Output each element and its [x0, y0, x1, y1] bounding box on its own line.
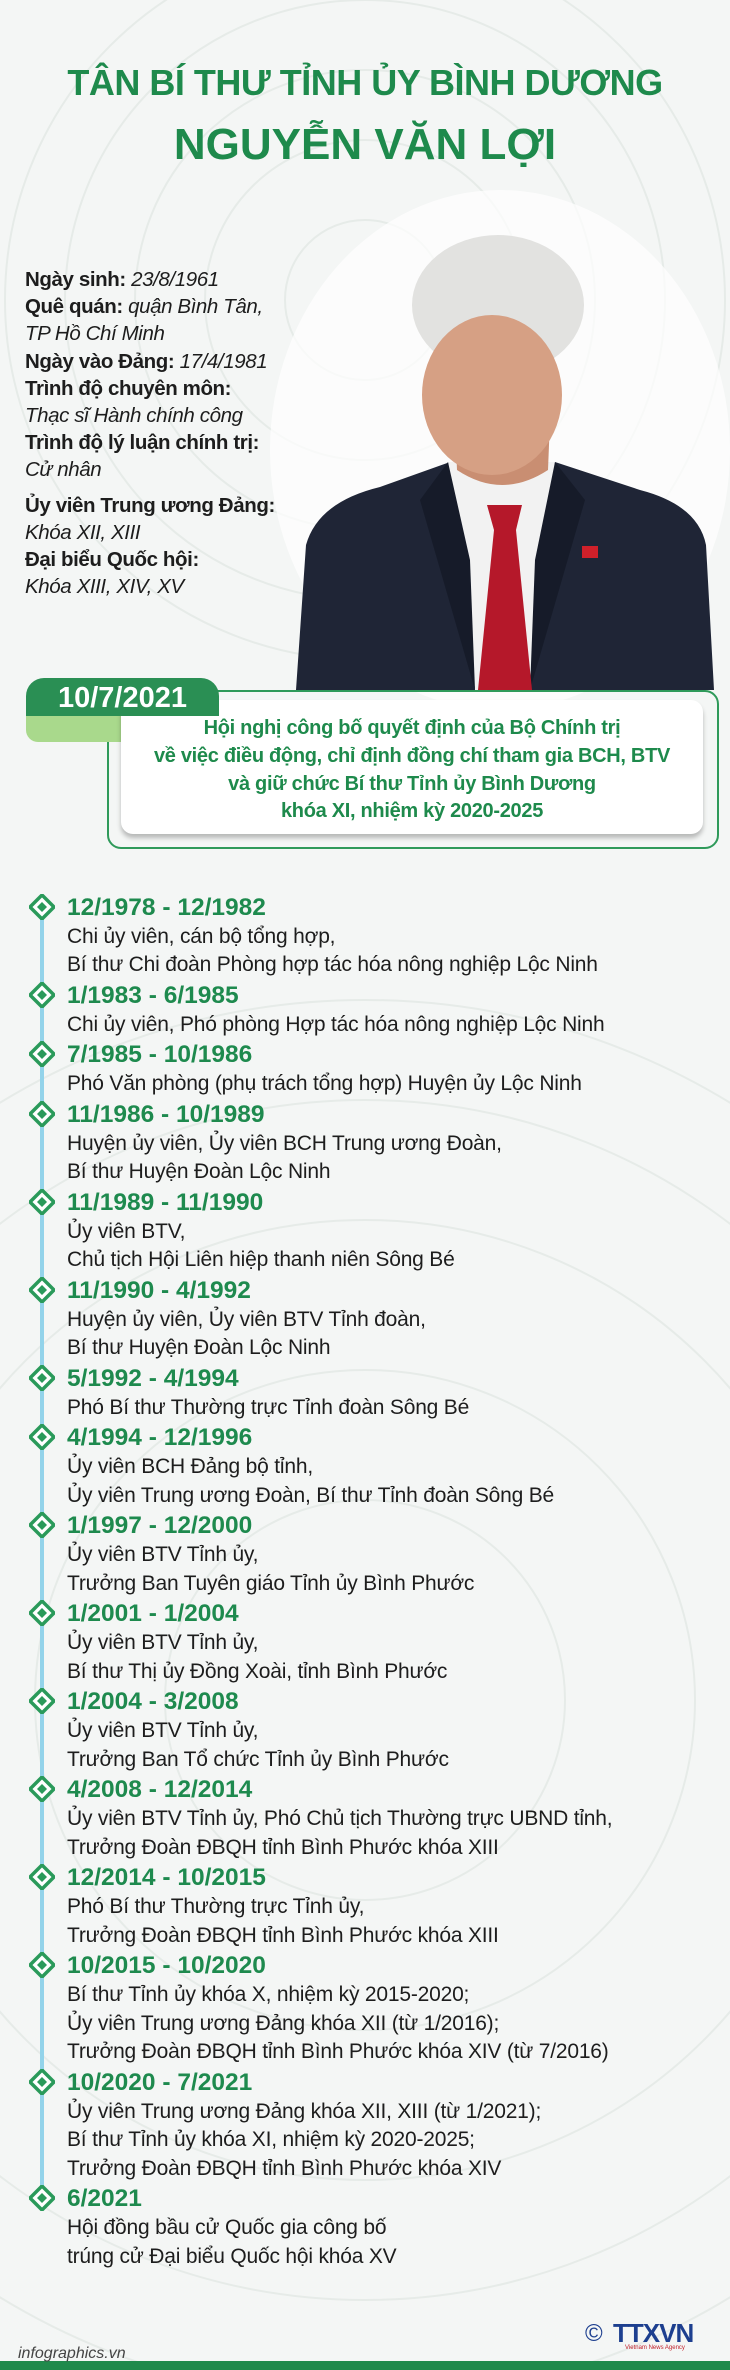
entry 1/2001: Bí thư Thị ủy Đồng Xoài, tỉnh Bình Phước: [67, 1660, 447, 1682]
entry 12/2014: Trưởng Đoàn ĐBQH tỉnh Bình Phước khóa XIII: [67, 1924, 499, 1946]
timeline line: [40, 910, 44, 2200]
entry 10/2020: Bí thư Tỉnh ủy khóa XI, nhiệm kỳ 2020-2025;: [67, 2128, 475, 2151]
entry 1/2004: Trưởng Ban Tổ chức Tỉnh ủy Bình Phước: [67, 1748, 449, 1770]
entry 1/1983: 1/1983 - 6/1985: [67, 982, 239, 1008]
personal info: Cử nhân: [25, 458, 101, 481]
entry 12/1978: [29, 894, 598, 976]
entry 1/1997: Trưởng Ban Tuyên giáo Tỉnh ủy Bình Phước: [67, 1572, 474, 1594]
light green strip: [26, 716, 126, 742]
logo: TTXVN: TTXVN: [613, 2318, 693, 2348]
entry 12/2014: Phó Bí thư Thường trực Tỉnh ủy,: [67, 1895, 364, 1918]
entry 7/1985: Phó Văn phòng (phụ trách tổng hợp) Huyện ủy Lộc Ninh: [67, 1072, 582, 1095]
entry 1/2004: 1/2004 - 3/2008: [67, 1688, 239, 1715]
neck: [455, 420, 550, 485]
entry 12/2014: [29, 1864, 499, 1946]
entry 10/2020: [29, 2068, 541, 2180]
hair: [412, 235, 584, 375]
entry 11/1986: 11/1986 - 10/1989: [67, 1100, 265, 1128]
personal info: Khóa XIII, XIV, XV: [25, 575, 184, 598]
entry 4/2008: 4/2008 - 12/2014: [67, 1776, 252, 1803]
timeline: [29, 894, 612, 2268]
entry 6/2021: Hội đồng bầu cử Quốc gia công bố: [67, 2216, 386, 2239]
portrait illustration: [296, 235, 714, 690]
entry 7/1985: [29, 1041, 582, 1095]
personal info: Trình độ chuyên môn:: [25, 377, 231, 400]
personal info: Khóa XII, XIII: [25, 521, 140, 544]
entry 1/1997: 1/1997 - 12/2000: [67, 1512, 252, 1539]
entry 1/1983: [29, 982, 604, 1036]
entry 1/1983: Chi ủy viên, Phó phòng Hợp tác hóa nông nghiệp Lộc Ninh: [67, 1012, 604, 1036]
personal info: Ủy viên Trung ương Đảng:: [25, 494, 275, 517]
personal info: Trình độ lý luận chính trị:: [25, 431, 259, 454]
white card: [121, 700, 703, 834]
entry 12/1978: Bí thư Chi đoàn Phòng hợp tác hóa nông nghiệp Lộc Ninh: [67, 953, 598, 976]
entry 10/2020: Trưởng Đoàn ĐBQH tỉnh Bình Phước khóa XIV: [67, 2156, 501, 2180]
name heading: NGUYỄN VĂN LỢI: [174, 120, 556, 169]
personal info: [25, 268, 275, 598]
entry 10/2015: Ủy viên Trung ương Đảng khóa XII (từ 1/2016);: [67, 2012, 499, 2034]
pin: [582, 546, 598, 558]
entry 10/2020: Ủy viên Trung ương Đảng khóa XII, XIII (từ 1/2021);: [67, 2100, 541, 2122]
personal info: Ngày vào Đảng: 17/4/1981: [25, 350, 267, 373]
entry 11/1990: 11/1990 - 4/1992: [67, 1276, 251, 1304]
entry 1/2001: [29, 1600, 447, 1682]
tie: [478, 505, 532, 690]
event text: Hội nghị công bố quyết định của Bộ Chính trị: [204, 717, 620, 739]
entry 6/2021: 6/2021: [67, 2185, 142, 2212]
entry 1/1997: Ủy viên BTV Tỉnh ủy,: [67, 1543, 258, 1566]
title: TÂN BÍ THƯ TỈNH ỦY BÌNH DƯƠNG: [67, 62, 663, 103]
entry 11/1989: Chủ tịch Hội Liên hiệp thanh niên Sông Bé: [67, 1248, 455, 1271]
entry 1/2004: Ủy viên BTV Tỉnh ủy,: [67, 1719, 258, 1742]
personal info: Đại biểu Quốc hội:: [25, 548, 199, 571]
entry 4/1994: [29, 1424, 554, 1506]
entry 11/1986: [29, 1100, 502, 1183]
personal info: Thạc sĩ Hành chính công: [25, 404, 243, 427]
lapels: [420, 462, 475, 690]
entry 6/2021: [29, 2185, 396, 2268]
footer website text: infographics.vn: [18, 2345, 126, 2362]
event text: khóa XI, nhiệm kỳ 2020-2025: [281, 800, 543, 822]
entry 10/2015: 10/2015 - 10/2020: [67, 1952, 266, 1979]
entry 4/1994: Ủy viên Trung ương Đoàn, Bí thư Tỉnh đoàn Sông Bé: [67, 1484, 554, 1506]
entry 10/2015: Bí thư Tỉnh ủy khóa X, nhiệm kỳ 2015-2020;: [67, 1983, 469, 2006]
entry 1/2001: 1/2001 - 1/2004: [67, 1600, 239, 1627]
entry 4/2008: [29, 1776, 612, 1858]
personal info: Ngày sinh: 23/8/1961: [25, 268, 219, 291]
entry 11/1989: Ủy viên BTV,: [67, 1220, 185, 1242]
event text: và giữ chức Bí thư Tỉnh ủy Bình Dương: [228, 773, 596, 795]
entry 4/2008: Trưởng Đoàn ĐBQH tỉnh Bình Phước khóa XIII: [67, 1836, 499, 1858]
entry 1/2004: [29, 1688, 449, 1770]
logo: TTXVN: [585, 2318, 693, 2351]
entry 11/1989: 11/1989 - 11/1990: [67, 1188, 263, 1216]
event callout box: [26, 678, 719, 849]
entry 10/2020: 10/2020 - 7/2021: [67, 2068, 252, 2096]
entry 11/1989: [29, 1188, 455, 1271]
event text: [154, 717, 670, 822]
entry 1/1997: [29, 1512, 474, 1594]
personal info: TP Hồ Chí Minh: [25, 322, 164, 345]
suit: [296, 462, 714, 690]
entry 4/1994: 4/1994 - 12/1996: [67, 1424, 252, 1451]
entry 10/2015: [29, 1952, 609, 2063]
outline frame: [107, 690, 719, 849]
entry 11/1986: Huyện ủy viên, Ủy viên BCH Trung ương Đoàn,: [67, 1132, 502, 1154]
footer bar: [0, 2361, 730, 2370]
entry 12/1978: 12/1978 - 12/1982: [67, 894, 266, 920]
entry 4/1994: Ủy viên BCH Đảng bộ tỉnh,: [67, 1455, 313, 1478]
entry 11/1990: Huyện ủy viên, Ủy viên BTV Tỉnh đoàn,: [67, 1308, 426, 1330]
entry 5/1992: 5/1992 - 4/1994: [67, 1364, 239, 1392]
event text: về việc điều động, chỉ định đồng chí tham gia BCH, BTV: [154, 745, 670, 767]
entry 12/1978: Chi ủy viên, cán bộ tổng hợp,: [67, 924, 335, 948]
shirt: [448, 462, 555, 690]
entry 5/1992: [29, 1364, 469, 1418]
logo: TTXVN: ©: [585, 2320, 603, 2347]
date tab: 10/7/2021: [58, 682, 187, 714]
entry 11/1990: [29, 1276, 426, 1359]
entry 11/1990: Bí thư Huyện Đoàn Lộc Ninh: [67, 1336, 330, 1359]
entry 5/1992: Phó Bí thư Thường trực Tỉnh đoàn Sông Bé: [67, 1396, 469, 1418]
date tab: [26, 678, 219, 716]
face: [422, 315, 562, 475]
personal info: Quê quán: quận Bình Tân,: [25, 295, 263, 318]
entry 10/2015: Trưởng Đoàn ĐBQH tỉnh Bình Phước khóa XIV (từ 7/2016): [67, 2040, 609, 2063]
entry 7/1985: 7/1985 - 10/1986: [67, 1041, 252, 1068]
entry 12/2014: 12/2014 - 10/2015: [67, 1864, 266, 1891]
logo: TTXVN: Vietnam News Agency: [625, 2345, 685, 2351]
entry 4/2008: Ủy viên BTV Tỉnh ủy, Phó Chủ tịch Thường trực UBND tỉnh,: [67, 1807, 612, 1830]
entry 6/2021: trúng cử Đại biểu Quốc hội khóa XV: [67, 2244, 396, 2268]
entry 1/2001: Ủy viên BTV Tỉnh ủy,: [67, 1631, 258, 1654]
entry 11/1986: Bí thư Huyện Đoàn Lộc Ninh: [67, 1160, 330, 1183]
